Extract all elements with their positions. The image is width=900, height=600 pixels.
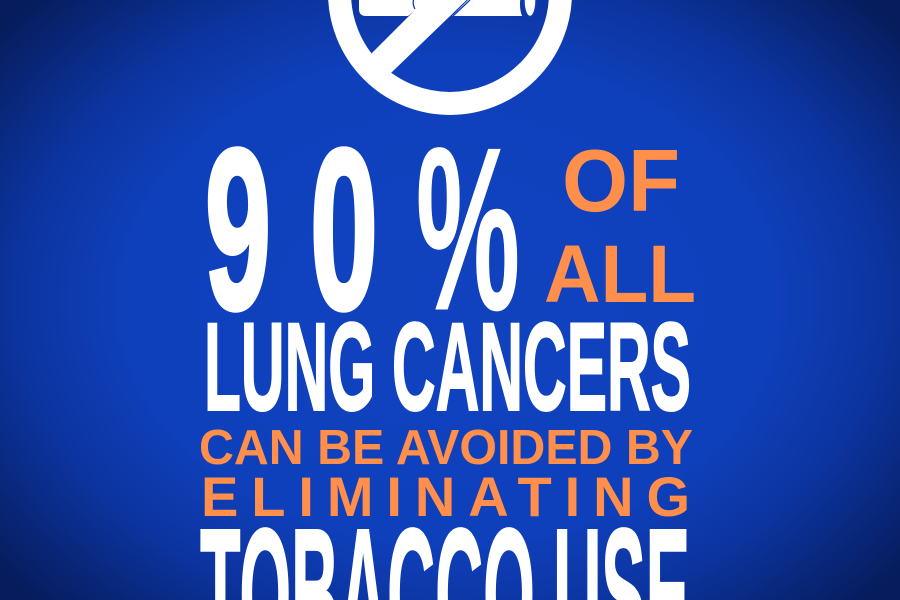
slash outline gap <box>413 0 470 16</box>
icon: no smoking <box>340 0 560 104</box>
text: ALL: ALL <box>544 229 696 320</box>
headline: 90% <box>205 100 520 359</box>
text: CAN BE AVOIDED BY: CAN BE AVOIDED BY <box>199 421 693 475</box>
text: OF: OF <box>562 131 680 230</box>
text: ELIMINATING: ELIMINATING <box>201 465 700 528</box>
prohibition slash <box>365 0 477 80</box>
digit 9: 9 <box>205 103 271 357</box>
digit 0: 0 <box>310 103 378 357</box>
cigarette body <box>359 0 522 16</box>
percent sign: % <box>416 100 520 359</box>
cigarette end cap <box>524 0 536 16</box>
prohibition ring <box>340 0 560 104</box>
